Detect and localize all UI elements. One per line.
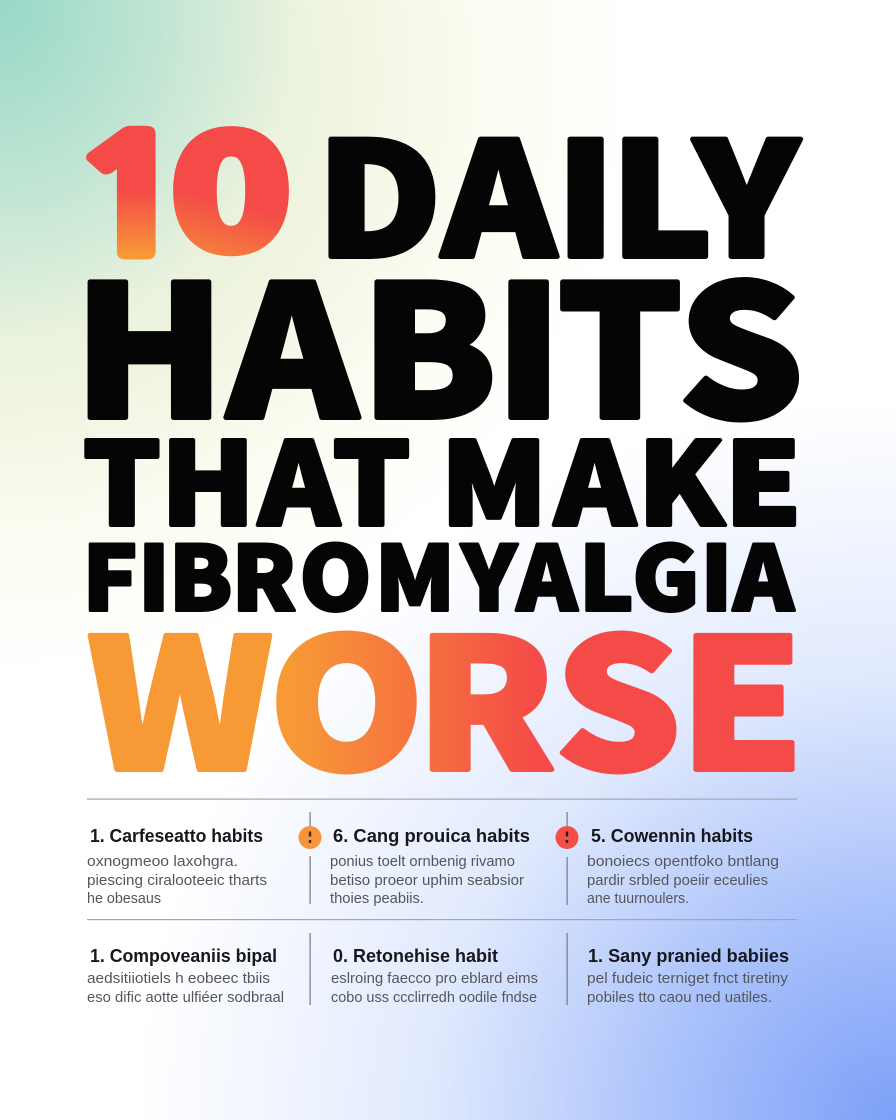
habit 5: eslroing faecco pro eblard eims [331,971,538,987]
habit 5: 0. Retonehise habit [333,946,498,966]
habit 1 [87,826,267,907]
habit 3: pardir srbled poeiir eceulies [587,873,768,889]
habit 1: piescing ciralooteeic tharts [87,873,267,889]
habit 1: oxnogmeoo laxohgra. [87,854,238,870]
habit 4: aedsitiiotiels h eobeec tbiis [87,971,270,987]
top divider [87,798,797,800]
row 2 separator right [566,933,568,1005]
habit 3: 5. Cowennin habits [591,826,753,846]
habit 3: ane tuurnoulers. [587,891,689,907]
habit 6 [587,946,789,1006]
title line: FIBROMYALGIA: FIBROMYALGIA [82,508,795,637]
habit 2: thoies peabiis. [330,891,424,907]
title [69,62,804,822]
habit 2: 6. Cang prouica habits [333,826,530,846]
habit 5: cobo uss ccclirredh oodile fndse [331,990,537,1006]
habit 5 [331,946,538,1006]
habit 4: eso dific aotte ulfiéer sodbraal [87,990,284,1006]
habit 4: 1. Compoveaniis bipal [90,946,277,966]
separator with orange alert icon [298,812,322,904]
separator with red alert icon [556,812,578,905]
title line: THAT MAKE: THAT MAKE [83,393,801,558]
habit 2: betiso proeor uphim seabsior [330,873,524,889]
title digit: 1: 1 [69,117,195,279]
habit 1: 1. Carfeseatto habits [90,826,263,846]
title line: HABITS: HABITS [73,206,804,470]
habit 3: bonoiecs opentfoko bntlang [587,854,779,870]
habit 6: 1. Sany pranied babiies [588,946,789,966]
middle divider [87,919,797,920]
habit 1: he obesaus [87,891,161,907]
title line: WORSE: WORSE [87,562,804,822]
habit 2: ponius toelt ornbenig rivamo [330,854,515,870]
title line: DAILY: DAILY [316,75,801,302]
row 2 separator left [310,933,311,1005]
title digit: 0: 0 [170,62,292,297]
habit 6: pel fudeic terniget fnct tiretiny [587,971,789,987]
habit 2 [330,826,530,907]
habit 4 [87,946,284,1006]
habit 6: pobiles tto caou ned uatiles. [587,990,772,1006]
habit 3 [587,826,779,907]
